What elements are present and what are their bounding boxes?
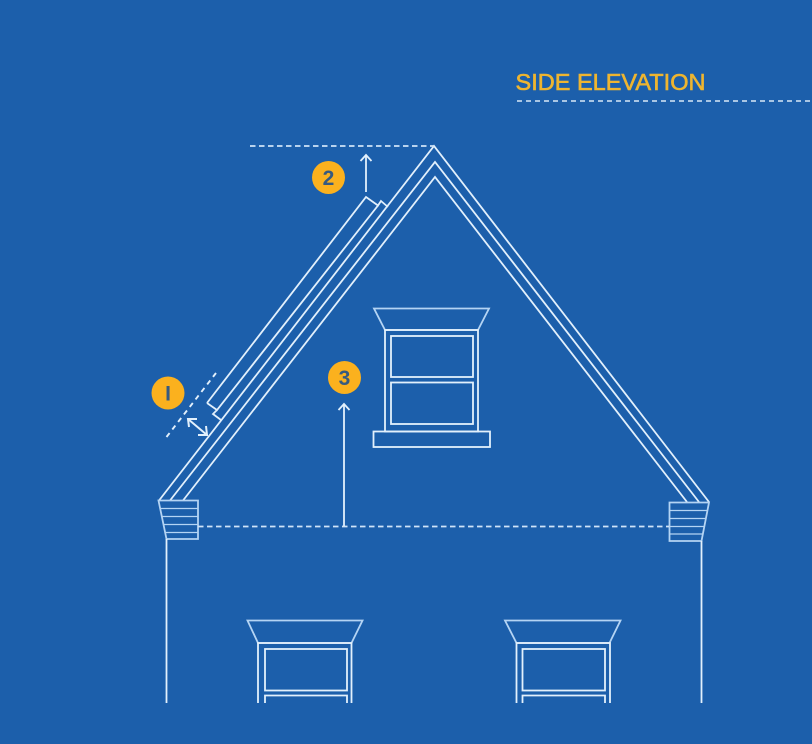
panel offset dashed line — [166, 373, 216, 437]
left eave bracket — [158, 500, 198, 539]
badge 1: I — [165, 382, 171, 406]
badge 2: 2 — [323, 167, 334, 190]
roof panel bottom notch — [213, 410, 221, 420]
title: side elevation: SIDE ELEVATION — [516, 69, 706, 95]
upper window — [374, 308, 490, 447]
badge 2 — [312, 161, 345, 194]
arrow: up from eaves — [338, 404, 350, 526]
badge 3: 3 — [339, 367, 350, 390]
roof outlines — [159, 146, 709, 502]
walls — [166, 539, 702, 703]
arrow: up to ridge — [360, 155, 372, 192]
roof panel — [207, 197, 388, 403]
roof panel lower edge — [207, 206, 378, 410]
lower left window — [248, 620, 362, 703]
arrow: panel offset double arrow — [188, 419, 207, 435]
badge 3 — [328, 361, 361, 394]
house elevation drawing — [158, 146, 709, 703]
right eave bracket — [670, 502, 709, 541]
lower right window — [505, 620, 620, 703]
eaves level dashed line — [198, 526, 669, 528]
badge 1 — [152, 376, 184, 410]
ridge height dashed line — [250, 145, 434, 147]
